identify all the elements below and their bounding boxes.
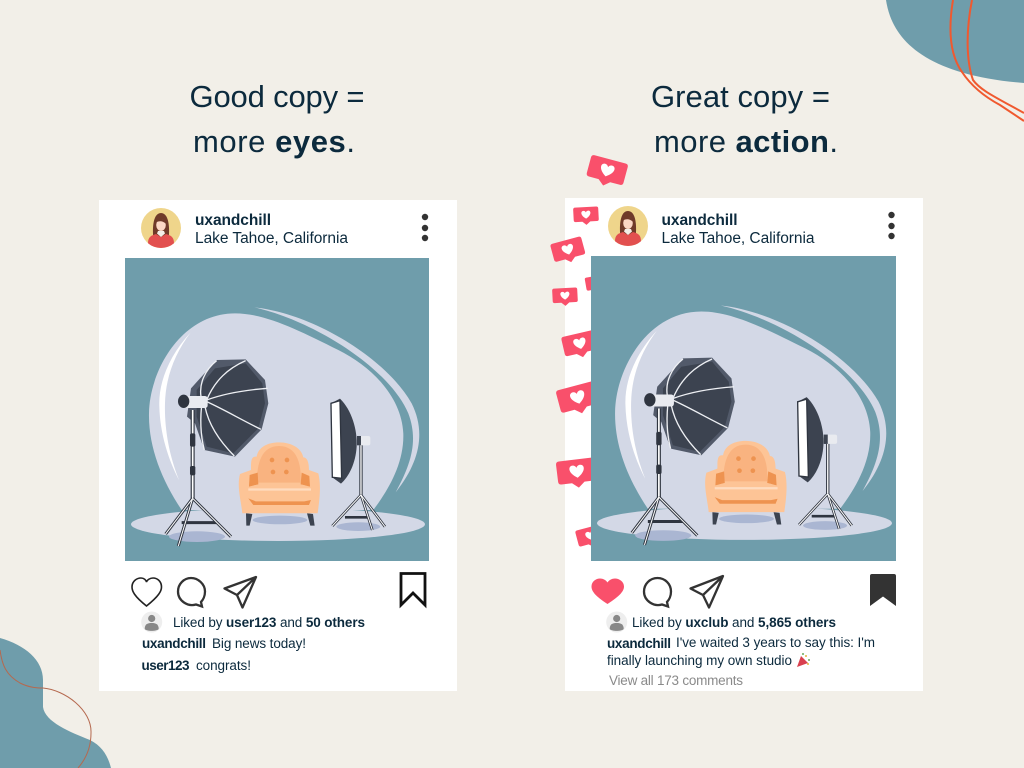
caption text: uxandchill [607, 636, 671, 651]
panel: good copy post [99, 200, 457, 691]
avatar [141, 208, 181, 248]
icon: liker avatar [141, 612, 162, 632]
icon: heart filled [592, 578, 624, 604]
illustration: photo studio [125, 258, 429, 561]
accent line: bottom left [0, 650, 91, 768]
icon: comment [644, 578, 671, 606]
caption text: uxandchill [142, 636, 206, 651]
icon: send [224, 577, 256, 608]
username and location [195, 212, 348, 247]
caption text: View all 173 comments [609, 673, 743, 688]
accent lines: top right [950, 0, 1024, 121]
heading: great copy [651, 79, 838, 159]
heading: good copy [190, 79, 364, 159]
heading: good copy: more eyes. [193, 124, 355, 159]
avatar [608, 206, 648, 246]
background blob: bottom left [0, 638, 111, 768]
username and location: uxandchill [195, 212, 271, 229]
more menu [422, 214, 428, 241]
username and location: Lake Tahoe, California [662, 230, 815, 247]
caption text: congrats! [196, 658, 251, 673]
icon: party popper [797, 653, 810, 667]
heading: great copy: Great copy = [651, 79, 830, 114]
heading: good copy: Good copy = [190, 79, 364, 114]
caption text [607, 615, 875, 688]
panel: great copy post [550, 154, 923, 691]
caption text: I've waited 3 years to say this: I'm [676, 635, 875, 650]
icon: bookmark filled [870, 574, 896, 606]
username and location [662, 212, 815, 247]
icon: send [690, 576, 723, 608]
icon: comment [178, 578, 205, 606]
caption text: Liked by user123 and 50 others [173, 615, 365, 630]
icon: bookmark [401, 574, 425, 605]
caption text: user123 [142, 658, 190, 673]
icon: heart outline [132, 578, 162, 606]
caption text: finally launching my own studio [607, 653, 792, 668]
caption text: Liked by uxclub and 5,865 others [632, 615, 836, 630]
caption text: Big news today! [212, 636, 306, 651]
like notifications [550, 154, 628, 551]
username and location: uxandchill [662, 212, 738, 229]
background blob: top right [886, 0, 1024, 83]
caption text [142, 615, 365, 673]
icon: liker avatar [606, 612, 627, 632]
username and location: Lake Tahoe, California [195, 230, 348, 247]
illustration: photo studio [591, 256, 896, 561]
heading: great copy: more action. [654, 124, 838, 159]
more menu [888, 212, 895, 239]
